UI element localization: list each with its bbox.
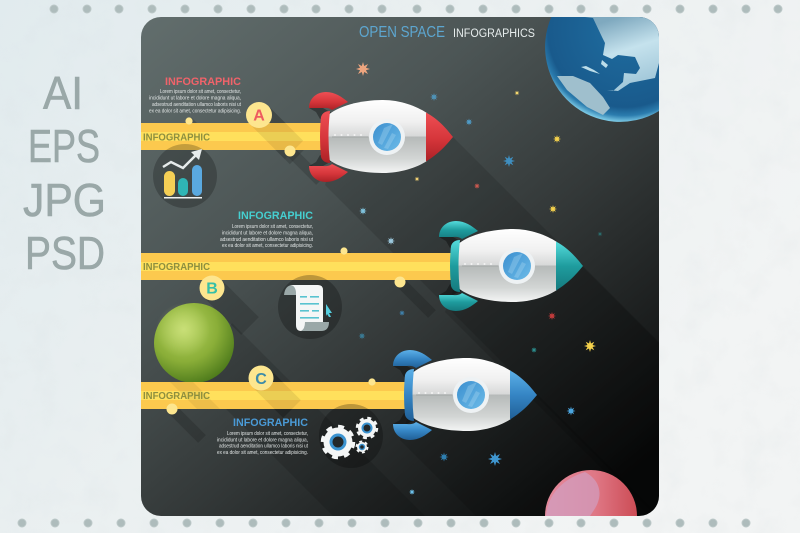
green planet — [154, 303, 234, 383]
text block A: adsestrud aenditation ullamco laboris nisi ut — [152, 102, 241, 108]
text block C: adsestrud aenditation ullamco laboris nisi ut — [219, 444, 308, 450]
text block A: incididunt ut labore et dolore magna aliqua, — [149, 96, 241, 102]
band B — [141, 253, 453, 280]
text block C — [217, 417, 308, 456]
text block A: ex ea dolor sit amet, consectetur adipisicing. — [149, 108, 241, 114]
callout A: A — [253, 108, 265, 124]
file format labels — [23, 67, 106, 279]
text block A: INFOGRAPHIC — [165, 76, 241, 88]
callout C: C — [255, 371, 267, 388]
band A: INFOGRAPHIC — [143, 132, 210, 144]
rocket B (teal) — [439, 221, 583, 311]
text block A: Lorem ipsum dolor sit amet, consectetur, — [160, 89, 241, 95]
band C — [141, 382, 405, 409]
long shadows — [197, 120, 659, 516]
callout shadows — [172, 115, 432, 439]
band B: INFOGRAPHIC — [143, 262, 210, 273]
title — [360, 26, 534, 37]
icon: chart — [153, 144, 217, 208]
top rivets — [50, 5, 782, 13]
callout C — [248, 366, 274, 390]
text block B: ex ea dolor sit amet, consectetur adipisicing. — [222, 243, 313, 249]
rocket C (blue) — [393, 350, 537, 440]
pink planet — [545, 470, 637, 516]
callout A — [246, 102, 272, 128]
text block B: adsestrud aenditation ullamco laboris nisi ut — [220, 237, 313, 243]
band A — [141, 123, 320, 150]
earth — [545, 17, 659, 122]
text block C: ex ea dolor sit amet, consectetur adipisicing. — [217, 450, 308, 456]
file format labels: EPS — [28, 120, 100, 172]
text block A — [149, 76, 241, 114]
file format labels: PSD — [25, 227, 105, 279]
stars — [356, 62, 602, 495]
file format labels: JPG — [23, 174, 106, 226]
file format labels: AI — [43, 67, 83, 119]
panel: space scene — [141, 17, 659, 516]
icon: gears — [319, 404, 383, 468]
rocket A (red) — [309, 92, 453, 182]
text block B: INFOGRAPHIC — [238, 210, 313, 222]
text block C: Lorem ipsum dolor sit amet, consectetur, — [227, 431, 308, 437]
callout B: B — [206, 280, 218, 298]
band dots — [166, 117, 406, 415]
title: INFOGRAPHICS — [453, 28, 535, 40]
text block B: Lorem ipsum dolor sit amet, consectetur, — [232, 224, 313, 230]
callout B — [200, 276, 224, 300]
text block C: INFOGRAPHIC — [233, 417, 308, 429]
text block B: incididunt ut labore et dolore magna aliqua, — [222, 230, 313, 236]
text block B — [220, 210, 313, 249]
band C: INFOGRAPHIC — [143, 391, 210, 402]
icon: scroll — [278, 275, 342, 339]
title: OPEN SPACE — [359, 24, 445, 41]
text block C: incididunt ut labore et dolore magna aliqua, — [217, 438, 308, 444]
bottom rivets — [18, 519, 750, 527]
